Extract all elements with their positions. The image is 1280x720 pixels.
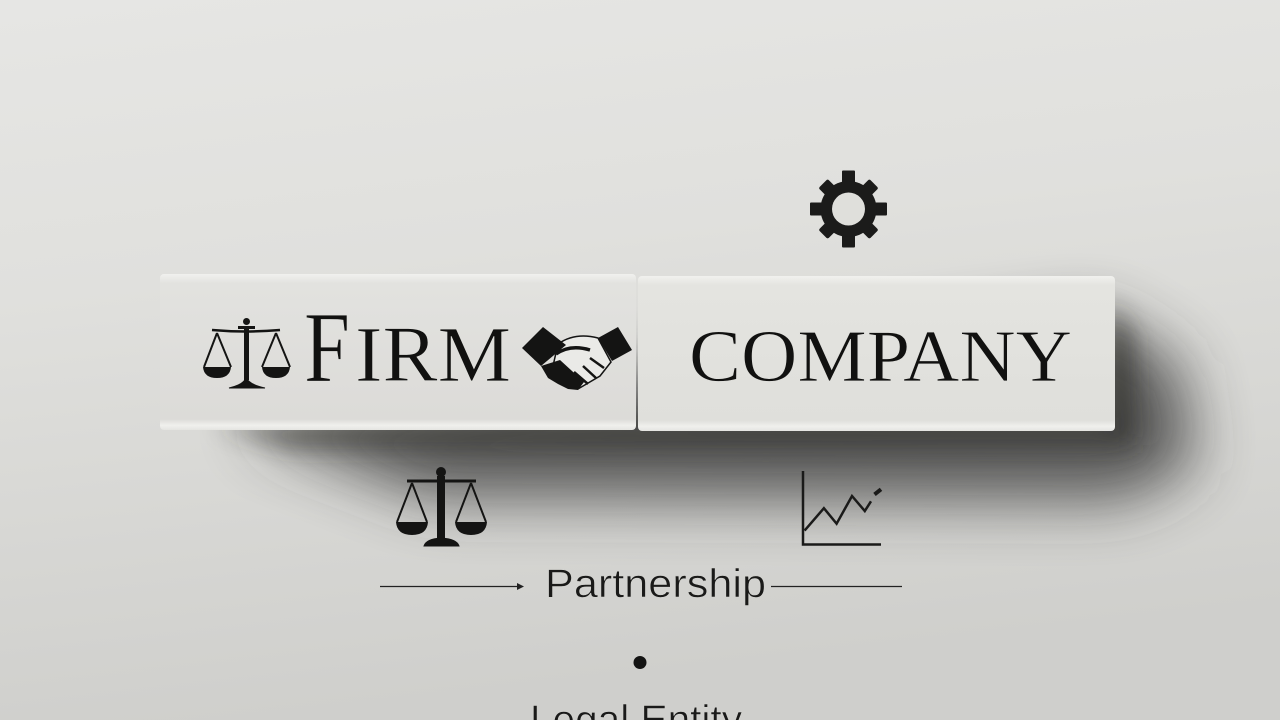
icon: gear (810, 170, 887, 248)
icon: line chart (803, 471, 881, 544)
arrow: left partnership line (380, 583, 524, 590)
block shadow (215, 305, 1195, 500)
panel: company block (638, 276, 1115, 431)
dot (634, 656, 646, 669)
text: Firm (304, 291, 511, 403)
text: Company: COMPANY (689, 316, 1072, 398)
icon: scales large (396, 467, 487, 546)
icon: handshake (522, 327, 632, 390)
text: Partnership: Partnership (545, 562, 766, 606)
icon: scales small (203, 318, 290, 388)
panel: firm block (160, 274, 636, 430)
line: right partnership line (771, 586, 902, 588)
text: Firm: IRM (355, 312, 511, 399)
text: Firm: F (304, 291, 350, 403)
